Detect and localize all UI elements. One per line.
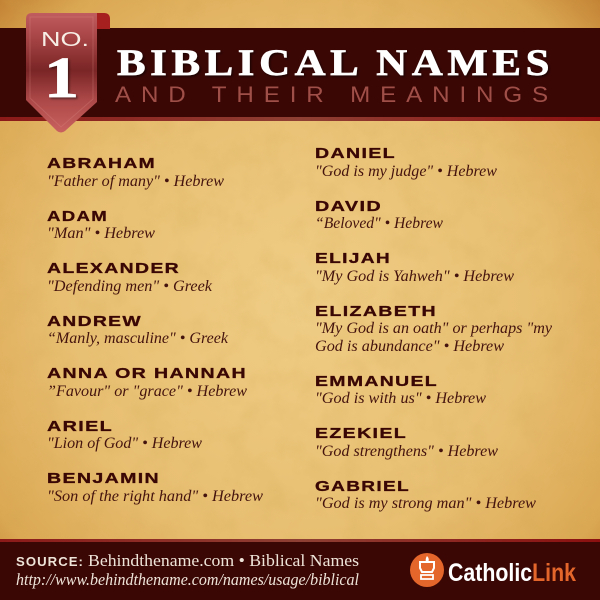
entry: David: DAVID (315, 199, 382, 215)
entry: Daniel: "God is my judge" • Hebrew (315, 163, 497, 180)
entry: Ariel: "Lion of God" • Hebrew (47, 435, 202, 452)
entry: David (315, 199, 443, 232)
label: no.: NO. (41, 29, 89, 51)
logo: CatholicLink (410, 553, 576, 587)
entry: Elizabeth (315, 304, 553, 355)
entry: Alexander: ALEXANDER (47, 261, 180, 277)
entry: Alexander (47, 261, 213, 295)
entry: Abraham: "Father of many" • Hebrew (47, 173, 224, 190)
ribbon body (26, 13, 97, 132)
source text: Behindthename.com • Biblical Names (88, 551, 359, 570)
entry: David: “Beloved" • Hebrew (315, 215, 443, 232)
title: BIBLICAL NAMES (117, 43, 554, 84)
logo text: CatholicLink (448, 559, 576, 587)
entry: Elizabeth: ELIZABETH (315, 304, 437, 320)
entry: Gabriel: GABRIEL (315, 479, 410, 495)
entry: Gabriel (315, 479, 536, 512)
entry: Emmanuel: EMMANUEL (315, 374, 438, 390)
entry: Ariel (47, 419, 202, 452)
entry: Anna or Hannah (47, 366, 247, 400)
entry: Elijah: "My God is Yahweh" • Hebrew (315, 268, 514, 285)
entry: Abraham (47, 156, 224, 190)
entry: Ariel: ARIEL (47, 419, 113, 435)
entry: Daniel: DANIEL (315, 146, 396, 162)
entry: Benjamin: BENJAMIN (47, 471, 160, 487)
numeral 1: 1 (44, 45, 79, 110)
entry: Adam: "Man" • Hebrew (47, 225, 155, 242)
source label: SOURCE: (16, 555, 84, 569)
entry: Emmanuel: "God is with us" • Hebrew (315, 390, 486, 407)
entry: Ezekiel: EZEKIEL (315, 426, 407, 442)
entry: Alexander: "Defending men" • Greek (47, 278, 213, 295)
entry: Elizabeth: "My God is an oath" or perhaps "my (315, 320, 553, 337)
entry: Emmanuel (315, 374, 486, 407)
right column of names (315, 146, 553, 512)
source url: http://www.behindthename.com/names/usage/biblical (16, 570, 359, 589)
subtitle: AND THEIR MEANINGS (115, 82, 558, 107)
entry: Elizabeth: God is abundance" • Hebrew (315, 338, 504, 355)
ribbon badge (26, 13, 110, 132)
entry: Adam: ADAM (47, 209, 108, 225)
entry: Elijah: ELIJAH (315, 251, 391, 267)
entry: Andrew (47, 314, 229, 347)
entry: Benjamin (47, 471, 263, 505)
entry: Benjamin: "Son of the right hand" • Hebrew (47, 488, 263, 505)
entry: Elijah (315, 251, 514, 285)
left column of names (47, 156, 263, 505)
entry: Ezekiel (315, 426, 498, 460)
footer (0, 539, 600, 600)
entry: Adam (47, 209, 155, 242)
entry: Anna or Hannah: ”Favour" or "grace" • Hebrew (47, 383, 247, 400)
entry: Daniel (315, 146, 497, 180)
ribbon inner line (30, 17, 93, 127)
entry: Abraham: ABRAHAM (47, 156, 156, 172)
ribbon fold (96, 13, 110, 29)
entry: Anna or Hannah: ANNA OR HANNAH (47, 366, 247, 382)
entry: Andrew: ANDREW (47, 314, 142, 330)
entry: Ezekiel: "God strengthens" • Hebrew (315, 443, 498, 460)
logo icon (410, 553, 444, 587)
header banner (0, 28, 600, 121)
entry: Gabriel: "God is my strong man" • Hebrew (315, 495, 536, 512)
entry: Andrew: “Manly, masculine" • Greek (47, 330, 229, 347)
